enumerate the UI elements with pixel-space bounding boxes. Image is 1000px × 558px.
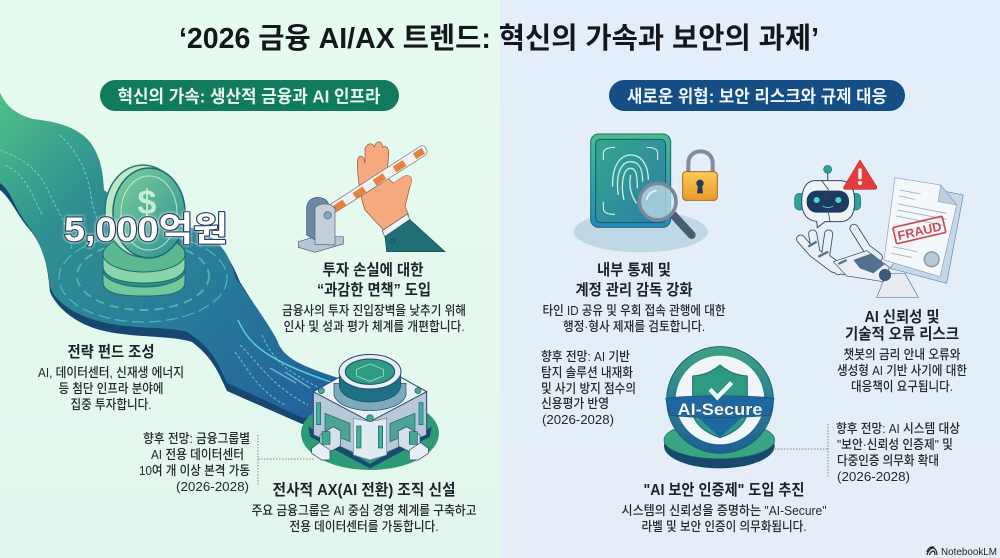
big number: 5,000억원: 5,000억원 bbox=[64, 211, 228, 249]
logo: NotebookLM: NotebookLM bbox=[941, 546, 997, 558]
text block: strategic fund: 전략 펀드 조성 bbox=[68, 343, 154, 361]
callout: detection outlook bbox=[541, 349, 636, 427]
text block: internal control bbox=[542, 261, 726, 334]
text block: bold exemption: 인사 및 성과 평가 체계를 개편합니다. bbox=[284, 319, 464, 334]
text block: internal control: 타인 ID 공유 및 우회 접속 관행에 대한 bbox=[542, 303, 726, 318]
text block: AI reliability: 대응책이 요구됩니다. bbox=[851, 379, 953, 394]
text block: AI security certification: "AI 보안 인증제" 도입 추진 bbox=[644, 481, 804, 499]
callout: detection outlook: (2026-2028) bbox=[542, 412, 614, 427]
text block: AX organisation: 전사적 AX(AI 전환) 조직 신설 bbox=[272, 481, 456, 499]
text block: internal control: 내부 통제 및 bbox=[597, 261, 671, 279]
text block: strategic fund bbox=[38, 343, 184, 412]
icon: AI-Secure badge: AI-Secure bbox=[677, 400, 762, 419]
callout: data center outlook: (2026-2028) bbox=[176, 479, 249, 494]
icon: AX building bbox=[301, 354, 439, 470]
callout: detection outlook: 및 사기 방지 점수의 bbox=[541, 381, 636, 396]
icon: hand stopping barrier bbox=[298, 142, 445, 252]
callout: certification outlook: (2026-2028) bbox=[837, 469, 910, 484]
text block: internal control: 행정·형사 제재를 검토합니다. bbox=[563, 319, 705, 334]
icon: cracked robot and fraud document: FRAUD bbox=[896, 219, 943, 243]
data river illustration bbox=[0, 93, 345, 425]
text block: bold exemption: “과감한 면책” 도입 bbox=[317, 281, 431, 299]
text block: AX organisation bbox=[252, 481, 477, 534]
icon: cracked robot and fraud document bbox=[795, 160, 963, 297]
text block: AI reliability: 기술적 오류 리스크 bbox=[845, 325, 959, 343]
callout: data center outlook: 향후 전망: 금융그룹별 bbox=[143, 431, 250, 446]
heading: risk pill bbox=[609, 80, 905, 111]
text block: bold exemption: 금융사의 투자 진입장벽을 낮추기 위해 bbox=[282, 303, 466, 318]
text block: AI reliability: AI 신뢰성 및 bbox=[864, 308, 940, 326]
text block: AI reliability: 생성형 AI 기반 사기에 대한 bbox=[837, 363, 967, 378]
text block: AI security certification: 라벨 및 보안 인증이 의무화됩니다. bbox=[642, 519, 806, 534]
icon: AI-Secure badge bbox=[664, 347, 775, 468]
text block: bold exemption: 투자 손실에 대한 bbox=[322, 261, 424, 279]
text block: strategic fund: AI, 데이터센터, 신재생 에너지 bbox=[38, 365, 184, 380]
callout: detection outlook: 탐지 솔루션 내재화 bbox=[541, 365, 633, 380]
icon: coin stack: $ bbox=[138, 184, 157, 222]
panel: innovation background bbox=[0, 0, 500, 558]
text block: AI reliability bbox=[837, 308, 967, 394]
icon: coin stack bbox=[103, 165, 185, 296]
callout: detection outlook: 향후 전망: AI 기반 bbox=[541, 349, 630, 364]
icon: fingerprint with magnifier and lock bbox=[574, 134, 717, 252]
text block: bold exemption bbox=[282, 261, 466, 334]
callout: certification outlook bbox=[775, 421, 960, 484]
callout: certification outlook: 향후 전망: AI 시스템 대상 bbox=[836, 421, 960, 436]
text block: strategic fund: 집중 투자합니다. bbox=[70, 397, 152, 412]
heading: innovation pill bbox=[100, 80, 399, 111]
callout: data center outlook: AI 전용 데이터센터 bbox=[151, 447, 244, 462]
text block: AI security certification bbox=[622, 481, 827, 534]
callout: data center outlook: 10여 개 이상 본격 가동 bbox=[139, 463, 250, 478]
callout: detection outlook: 신용평가 반영 bbox=[541, 396, 609, 411]
callout: data center outlook bbox=[139, 431, 315, 494]
text block: AI security certification: 시스템의 신뢰성을 증명하는 "AI-Secure" bbox=[622, 503, 827, 518]
text block: AX organisation: 주요 금융그룹은 AI 중심 경영 체계를 구축하고 bbox=[252, 503, 477, 518]
callout: certification outlook: "보안·신뢰성 인증제" 및 bbox=[837, 437, 953, 452]
text block: strategic fund: 등 첨단 인프라 분야에 bbox=[58, 381, 164, 396]
title: ‘2026 금융 AI/AX 트렌드: 혁신의 가속과 보안의 과제’ bbox=[179, 22, 819, 55]
text block: internal control: 계정 관리 감독 강화 bbox=[576, 281, 692, 299]
heading: risk pill: 새로운 위협: 보안 리스크와 규제 대응 bbox=[627, 86, 887, 106]
text block: AX organisation: 전용 데이터센터를 가동합니다. bbox=[290, 519, 438, 534]
text block: AI reliability: 챗봇의 금리 안내 오류와 bbox=[844, 347, 961, 362]
heading: innovation pill: 혁신의 가속: 생산적 금융과 AI 인프라 bbox=[118, 86, 380, 106]
callout: certification outlook: 다중인증 의무화 확대 bbox=[837, 453, 939, 468]
panel: risk background bbox=[500, 0, 1000, 558]
